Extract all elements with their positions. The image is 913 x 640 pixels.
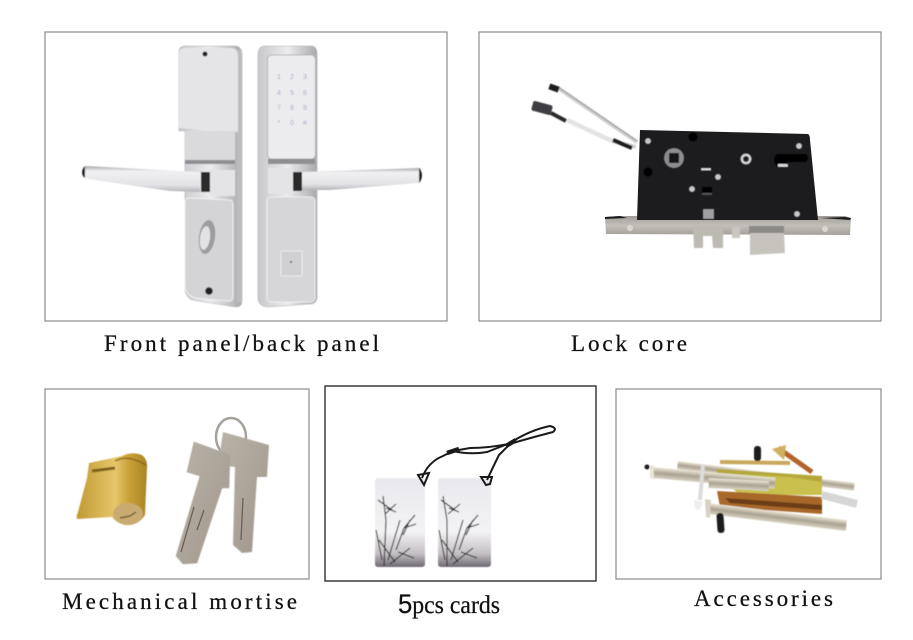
caption: accessories: Accessories — [694, 586, 833, 611]
panel: 5pcs cards — [325, 386, 596, 581]
keypad digits: 1 — [277, 74, 281, 81]
keypad digits: 0 — [290, 120, 294, 127]
lock: front panel — [82, 46, 242, 307]
keypad digits: 9 — [303, 105, 307, 112]
keypad digits: 5 — [290, 90, 294, 97]
keypad digits: # — [303, 120, 307, 127]
panel: accessories — [616, 389, 881, 579]
faceplate — [605, 216, 851, 235]
panel: lock core — [479, 32, 881, 321]
caption: front panel/back panel: Front panel/back panel — [104, 331, 379, 356]
key grooves — [181, 498, 243, 552]
panel: mechanical mortise — [45, 389, 309, 579]
caption: lock core: Lock core — [571, 331, 687, 356]
key two — [218, 432, 269, 553]
cords — [418, 426, 555, 485]
cover plate — [179, 48, 238, 132]
keypad digits: 2 — [290, 74, 294, 81]
wires and connectors — [531, 83, 637, 148]
caption: 5pcs cards: 5pcs cards — [398, 589, 500, 619]
thumb turn — [197, 219, 217, 255]
panel: front panel / back panel — [45, 32, 447, 321]
screws and plates — [644, 445, 857, 533]
key ring — [216, 418, 246, 456]
lock: back panel with keypad — [258, 46, 422, 307]
keypad screen — [268, 55, 316, 159]
keypad digits: 6 — [303, 90, 307, 97]
lower plate with card reader — [267, 197, 315, 302]
keypad digits: 8 — [290, 105, 294, 112]
card two — [438, 478, 491, 567]
lever handle — [82, 166, 200, 192]
brass cylinder — [77, 453, 147, 525]
caption: mechanical mortise: Mechanical mortise — [62, 589, 297, 614]
keypad digits — [277, 74, 307, 127]
lever handle — [302, 168, 422, 190]
keypad digits: * — [278, 120, 281, 127]
keypad digits: 7 — [277, 105, 281, 112]
latch and bolt — [693, 226, 785, 255]
keypad digits: 3 — [303, 74, 307, 81]
lower plate — [185, 198, 233, 301]
card one — [375, 478, 425, 567]
mortise details — [644, 132, 808, 219]
mortise body — [637, 130, 818, 220]
key one — [176, 442, 230, 564]
keypad digits: 4 — [277, 90, 281, 97]
